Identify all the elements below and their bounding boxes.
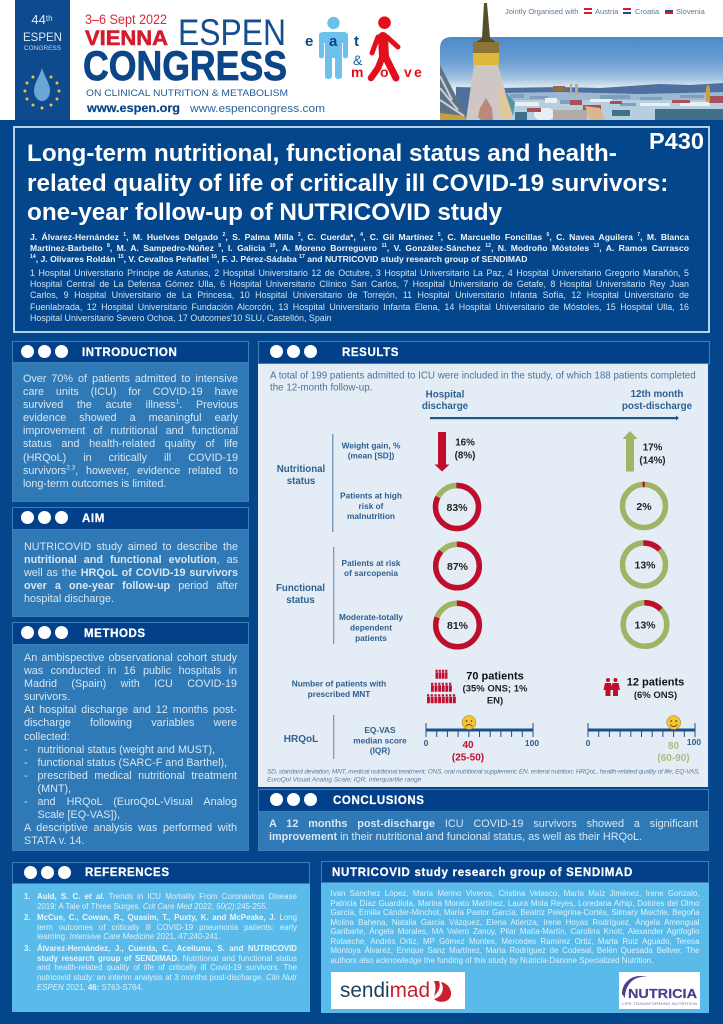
affiliations: Carlos, 9 Hospital Universitario de La Princesa, 10 Hospital Universitario de Torrejón, 11 Hospital Universitario Infanta Sofía, 12 Hospital Universitario de: [30, 290, 689, 300]
organisers line: Croatia: [635, 7, 660, 16]
research group text: authors also acknowledge the funding of this study by Nutricia-Danone Specialized Nutrition.: [330, 956, 653, 964]
introduction text: status and health-related quality of life: [23, 438, 238, 450]
row label: weight gain: (mean [SD]): [348, 450, 395, 460]
methods text: At hospital discharge and 12 months post-: [24, 704, 237, 716]
value: 70 patients: [463, 670, 528, 706]
icon: two patients: [604, 678, 620, 696]
introduction text: long-term outcomes is limited.: [23, 478, 166, 490]
event wordmark: ON CLINICAL NUTRITION & METABOLISM: [86, 88, 288, 99]
column heading: hospital discharge: discharge: [422, 401, 469, 412]
timeline arrow: [430, 416, 679, 420]
aim text: NUTRICOVID study aimed to describe the: [24, 541, 238, 553]
eat and move logo: &: [353, 52, 363, 68]
value: 12 patients: [627, 676, 684, 701]
weight gain arrow: [622, 431, 638, 472]
reference 3: study research group of SENDIMAD. Nutritional and functional status: [37, 954, 297, 963]
footnote: EuroQol Visual Analog Scale; IQR, interquartile range: [267, 776, 422, 784]
row label: malnutrition: malnutrition: [347, 511, 395, 521]
event wordmark: www.espencongress.com: [189, 103, 325, 115]
blue side ribbon: [15, 0, 70, 120]
aim text: well as the HRQoL of COVID-19 survivors: [24, 567, 238, 579]
column heading: 12th month: 12th month: [631, 389, 683, 400]
column heading: 12th month: [622, 389, 693, 412]
row label: EQ-VAS: [353, 725, 407, 756]
scale: EQ-VAS at discharge: [424, 723, 539, 764]
introduction text: survivors2,3, however, evidence related to: [23, 464, 238, 477]
group label: functional status: [276, 583, 325, 606]
scale: EQ-VAS at discharge: (25-50): [452, 752, 484, 764]
donut: sarcopenia 12 months 13%: [622, 543, 666, 586]
affiliations: Hospital Universitario Severo Ochoa, 17 Outcomes'10 SLU, Castellón, Spain: [30, 313, 332, 323]
research group text: Garibarte, Ángela Morales, MA Valero Zanuy, Pilar Matía-Martín, Carolina Knott, Alexander Agrifoglio: [330, 927, 700, 936]
scale: EQ-VAS at 12 months: [586, 723, 701, 764]
methods text: functional status (SARC-F and Barthel),: [38, 757, 227, 769]
reference list: [24, 892, 298, 992]
row label: prescribed MNT: prescribed MNT: [308, 689, 370, 699]
references heading: REFERENCES: [85, 867, 170, 879]
scale: EQ-VAS at discharge: 0: [424, 738, 429, 748]
logo: nutricia: NUTRICIA: [628, 986, 698, 1001]
eat and move logo: o: [380, 64, 389, 80]
icon: sad face: [462, 716, 476, 730]
methods text: -: [24, 770, 28, 782]
organisers line: Slovenia: [676, 7, 706, 16]
aim text: hospital discharge.: [24, 593, 114, 605]
research group heading: [321, 861, 709, 883]
aim heading: [12, 507, 249, 530]
logo: nutricia: LIFE-TRANSFORMING NUTRITION: [622, 1002, 697, 1006]
organisers line: Austria: [595, 7, 619, 16]
title: [27, 140, 668, 226]
authors: [30, 232, 690, 264]
title: one-year follow-up of NUTRICOVID study: [27, 199, 502, 226]
value: 70 patients: 70 patients: [466, 670, 524, 682]
event wordmark: 3–6 Sept 2022: [85, 12, 167, 27]
row label: EQ-VAS: median score: [353, 736, 407, 746]
row label: dependent patients: patients: [355, 633, 387, 643]
introduction text: survived the acute illness1. Previous: [23, 399, 238, 411]
header band: [0, 0, 723, 120]
reference 1: [24, 892, 297, 911]
eat and move logo: t: [354, 33, 359, 50]
methods text: discharge following variables were: [24, 717, 237, 729]
introduction heading: INTRODUCTION: [82, 347, 177, 359]
eat and move logo: a: [329, 33, 338, 50]
footnote: [267, 768, 700, 784]
event wordmark: CONGRESS: [83, 42, 287, 89]
methods text: nutritional status (weight and MUST),: [38, 744, 215, 756]
methods heading: [12, 622, 249, 645]
scale: EQ-VAS at 12 months: 80: [668, 741, 679, 752]
research group text: Ivan Sánchez López, María Merino Viveros, Cristina Velasco, María Maíz Jiménez, Irene Gonzalo,: [330, 889, 700, 898]
research group text: García, Emilia Cánder-Minchot, María Pastor García, Beatriz Pelegrina-Cortés, Silmary Maichle, Begoña: [330, 908, 700, 917]
logo: sendimad: [331, 972, 465, 1009]
row label: prescribed MNT: [292, 678, 386, 699]
eat and move logo: v: [404, 64, 412, 80]
header rule: [0, 120, 723, 125]
logo: nutricia: [619, 972, 700, 1009]
title panel: [13, 126, 710, 333]
affiliations: [30, 268, 689, 323]
conclusions text: [258, 811, 709, 851]
results intro text: A total of 199 patients admitted to ICU were included in the study, of which 188 patients completed: [270, 370, 696, 382]
weight loss value: (8%): [455, 450, 475, 462]
reference 1: 2019: A Tale of Three Surges. Crit Care Med 2022, 50(2):245-255.: [37, 902, 268, 911]
panel: results: [258, 341, 710, 787]
eat and move logo: m: [351, 64, 363, 80]
methods text: -: [24, 796, 28, 808]
Vienna skyline photo: [440, 3, 723, 120]
weight loss arrow: [434, 432, 450, 472]
reference 2: learning. Intensive Care Medicine 2021, 47:240-241.: [37, 932, 220, 941]
row label: EQ-VAS: (IQR): [370, 746, 390, 756]
row label: dependent patients: dependent: [350, 622, 392, 632]
organisers line: Jointly Organised with: [505, 7, 578, 16]
research group text: Montoya Álvarez, Enrique Sanz Martínez, Marta Rodríguez de Codesal, Belén Quesada Bellver. The: [330, 946, 700, 955]
reference 3: [24, 944, 298, 992]
donut: malnutrition discharge 83%: [436, 486, 478, 528]
methods text: -: [24, 744, 28, 756]
reference 3: 3.: [24, 944, 31, 953]
panel: research group: [321, 861, 709, 1013]
blue side ribbon: CONGRESS: [24, 45, 62, 52]
weight loss value: [455, 438, 475, 462]
research group text: Molina Bahena, Natalia García Vázquez, Elena Atienza, Irene Hoyas Rodríguez, Ángela Amengual: [330, 918, 700, 926]
reference 2: McCue, C., Cowan, R., Quasim, T., Puxty, K. and McPeake, J. Long: [37, 913, 297, 922]
reference 2: [24, 913, 297, 941]
event wordmark: VIENNA: [85, 26, 168, 50]
row label: sarcopenia: [341, 558, 401, 578]
congress logo and dates: [15, 0, 422, 120]
donut: malnutrition discharge 83%: 83%: [446, 502, 468, 514]
methods text: Scale [EQ-VAS]),: [38, 809, 120, 821]
panel: references: [12, 862, 310, 1012]
conclusions text: improvement in their nutritional and funcional status, as well as their HRQoL.: [269, 831, 642, 843]
donut: malnutrition 12 months 2%: [622, 484, 666, 528]
methods text: STATA v. 14.: [24, 835, 84, 847]
research group text: Patricia Díaz Guardiola, Marina Morato Martínez, Laura Mola Reyes, Loredana Arhip, Dolores del Olmo: [330, 898, 700, 908]
reference 1: Auld, S. C. et al. Trends in ICU Mortality From Coronavirus Disease: [37, 892, 297, 901]
value: 12 patients: 12 patients: [627, 676, 684, 688]
aim text: [12, 529, 249, 617]
aim text: nutritional and functional evolution, as: [24, 554, 238, 566]
methods text: survivors.: [24, 691, 70, 703]
category dividers: [332, 434, 334, 759]
conclusions heading: CONCLUSIONS: [333, 795, 425, 807]
row label: weight gain: Weight gain, %: [342, 440, 401, 450]
aim heading: AIM: [82, 513, 105, 525]
reference 2: term outcomes of critically ill COVID-19 pneumonia patients: early: [37, 923, 297, 932]
affiliations: Fuenlabrada, 12 Hospital Universitario Fundación Alcorcón, 13 Hospital Universitario Infanta Elena, 14 Hospital Universitario de Móstoles, 15 Hospital Ulla, 16: [30, 302, 689, 312]
donut: dependency discharge 81%: 81%: [447, 620, 469, 632]
group label: nutritional status: [277, 464, 325, 487]
conclusions text: A 12 months post-discharge ICU COVID-19 survivors showed a significant: [269, 818, 698, 830]
eat and move logo: e: [414, 64, 422, 80]
results intro text: the 12-month follow-up.: [270, 382, 372, 394]
eat and move logo: e: [305, 33, 313, 50]
donut: sarcopenia discharge 87%: 87%: [447, 561, 469, 573]
scale: EQ-VAS at 12 months: (60-90): [657, 753, 690, 764]
methods text: prescribed medical nutritional treatment: [38, 770, 237, 782]
donut: dependency discharge 81%: [436, 603, 479, 647]
row label: malnutrition: [340, 490, 402, 521]
methods text: collected:: [24, 731, 70, 743]
research group heading: NUTRICOVID study research group of SENDIMAD: [332, 867, 633, 879]
methods text: A descriptive analysis was performed with: [24, 822, 237, 834]
group label: nutritional status: Nutritional: [277, 464, 325, 475]
panel: conclusions: [258, 789, 709, 851]
reference 1: 1.: [24, 892, 31, 901]
scale: EQ-VAS at discharge: 100: [525, 738, 539, 748]
methods heading: METHODS: [84, 628, 146, 640]
reference 3: Álvarez-Hernández, J., Cuerda, C., Aceituno, S. and NUTRICOVID: [37, 944, 297, 953]
eat and move logo: [305, 16, 422, 80]
event wordmark: ESPEN: [178, 12, 286, 53]
column heading: hospital discharge: [422, 390, 469, 412]
results infographic: [267, 370, 701, 784]
introduction text: [12, 362, 249, 502]
group label: HRQoL: HRQoL: [284, 734, 318, 745]
scale: EQ-VAS at 12 months: 0: [586, 738, 591, 748]
introduction text: improvement of nutritional and functional: [23, 425, 238, 437]
donut: dependency 12 months 13%: 13%: [634, 620, 656, 632]
introduction text: care units (ICU) for COVID-19 have: [23, 386, 238, 398]
reference 3: nutricovid study: an interim analysis at 3 months post-discharge. Clin Nutr: [37, 973, 297, 982]
row label: EQ-VAS: EQ-VAS: [364, 725, 396, 735]
row label: dependent patients: [339, 612, 403, 643]
scale: EQ-VAS at discharge: 40: [462, 740, 474, 751]
introduction text: (HRQoL) in critically ill COVID-19: [23, 452, 238, 464]
scale: EQ-VAS at 12 months: 100: [687, 737, 701, 747]
group label: functional status: Functional: [276, 583, 325, 594]
results intro text: [270, 370, 696, 394]
introduction text: evidence showed a meaningful early: [23, 412, 238, 424]
donut: dependency 12 months 13%: [623, 603, 667, 646]
weight loss value: 16%: [455, 438, 475, 448]
reference 2: 2.: [24, 913, 31, 922]
methods text: was conducted in 16 public hospitals in: [24, 665, 237, 677]
methods text: (MNT),: [38, 783, 71, 795]
weight gain value: 17%: [643, 442, 663, 454]
introduction text: Over 70% of patients admitted to intensive: [23, 373, 238, 385]
reference 3: ESPEN 2021, 46: S763-S764.: [37, 983, 143, 992]
row label: weight gain: [342, 440, 401, 460]
results heading: RESULTS: [342, 347, 399, 359]
column heading: 12th month: post-discharge: [622, 401, 693, 412]
affiliations: Hospital Central de La Defensa Gómez Ulla, 6 Hospital Universitario Clínico San Carlos, 7 Hospital Universitario de Getafe, 8 Hospital Universitario Rey Juan: [30, 279, 689, 289]
blue side ribbon: 44: [31, 12, 46, 27]
blue side ribbon: ESPEN: [23, 32, 62, 44]
donut: sarcopenia discharge 87%: [436, 544, 479, 588]
authors: 14, J. Olivares Roldán 15, V. Cevallos Peñafiel 16, F. J. Pérez-Sádaba 17 and NUTRICOVID study research group of SENDIMAD: [30, 254, 527, 264]
panel: aim: [12, 507, 249, 617]
value: 12 patients: (6% ONS): [634, 690, 677, 701]
poster number: P430: [649, 128, 704, 154]
footnote: SD, standard deviation; MNT, medical nutritional treatment; ONS, oral nutritional supplement; EN, enteral nutrition; HRQoL, health-related quality of life; EQ-VAS,: [267, 768, 700, 776]
affiliations: 1 Hospital Universitario Príncipe de Asturias, 2 Hospital Universitario 12 de Octubre, 3 Hospital Universitario La Paz, 4 Hospital Universitario Gregorio Marañón, 5: [30, 268, 689, 278]
conclusions heading: [258, 789, 709, 812]
title: related quality of life of critically ill COVID-19 survivors:: [27, 170, 668, 196]
event wordmark: www.espen.org: [86, 103, 180, 115]
reference 3: and health-related quality of life of critically ill Covid-19 survivors. The: [37, 963, 297, 972]
donut: sarcopenia 12 months 13%: 13%: [634, 560, 656, 572]
icon: group of patients: [427, 671, 456, 700]
aim text: over a one-year follow-up period after: [24, 580, 238, 592]
panel: introduction: [12, 341, 249, 502]
blue side ribbon: th: [46, 14, 53, 23]
methods text: [12, 644, 249, 851]
event wordmark: [83, 12, 325, 115]
group label: functional status: status: [286, 595, 315, 606]
references heading: [12, 862, 310, 884]
value: 70 patients: EN): [487, 696, 503, 706]
introduction heading: [12, 341, 249, 363]
methods text: Madrid (Spain) with ICU COVID-19: [24, 678, 237, 690]
research group text: Rotaeche, Andrés Ortiz, MP Gómez Montes, Mercedes Ramírez Ortiz, Marta Ruiz Aguado, Teresa: [330, 936, 700, 946]
weight gain value: (14%): [639, 456, 666, 466]
row label: dependent patients: Moderate-totally: [339, 612, 403, 622]
row label: malnutrition: risk of: [359, 501, 384, 511]
group label: nutritional status: status: [287, 476, 315, 487]
icon: happy face: [667, 716, 681, 730]
value: 70 patients: (35% ONS; 1%: [463, 684, 528, 694]
row label: prescribed MNT: Number of patients with: [292, 678, 386, 688]
research group text: [330, 889, 700, 964]
authors: J. Álvarez-Hernández 1, M. Huelves Delgado 2, S. Palma Milla 3, C. Cuerda*, 4, C. Gil Martínez 5, C. Marcuello Foncillas 6, C. Navea Aguilera 7, M. Blanca: [30, 232, 689, 242]
results heading: [258, 341, 710, 364]
organisers line: [440, 3, 723, 120]
methods text: -: [24, 757, 28, 769]
row label: malnutrition: Patients at high: [340, 490, 402, 500]
authors: Martínez-Barbeito 8, M. A. Sampedro-Núñez 9, I. Galicia 10, A. Moreno Borreguero 11, V. González-Sánchez 12, N. Modroño Móstoles 13, A. Ramos Carrasco: [30, 243, 689, 253]
title: Long-term nutritional, functional status and health-: [27, 140, 617, 167]
row label: sarcopenia: of sarcopenia: [344, 568, 398, 578]
donut: malnutrition 12 months 2%: 2%: [636, 501, 652, 513]
methods text: and HRQoL (EuroQoL-Visual Analog: [38, 796, 237, 808]
weight gain value: [639, 442, 666, 466]
column heading: hospital discharge: Hospital: [426, 390, 465, 400]
methods text: An ambispective observational cohort study: [24, 652, 237, 664]
panel: methods: [12, 622, 249, 851]
logo: sendimad: sendimad: [340, 978, 430, 1002]
row label: sarcopenia: Patients at risk: [341, 558, 401, 568]
